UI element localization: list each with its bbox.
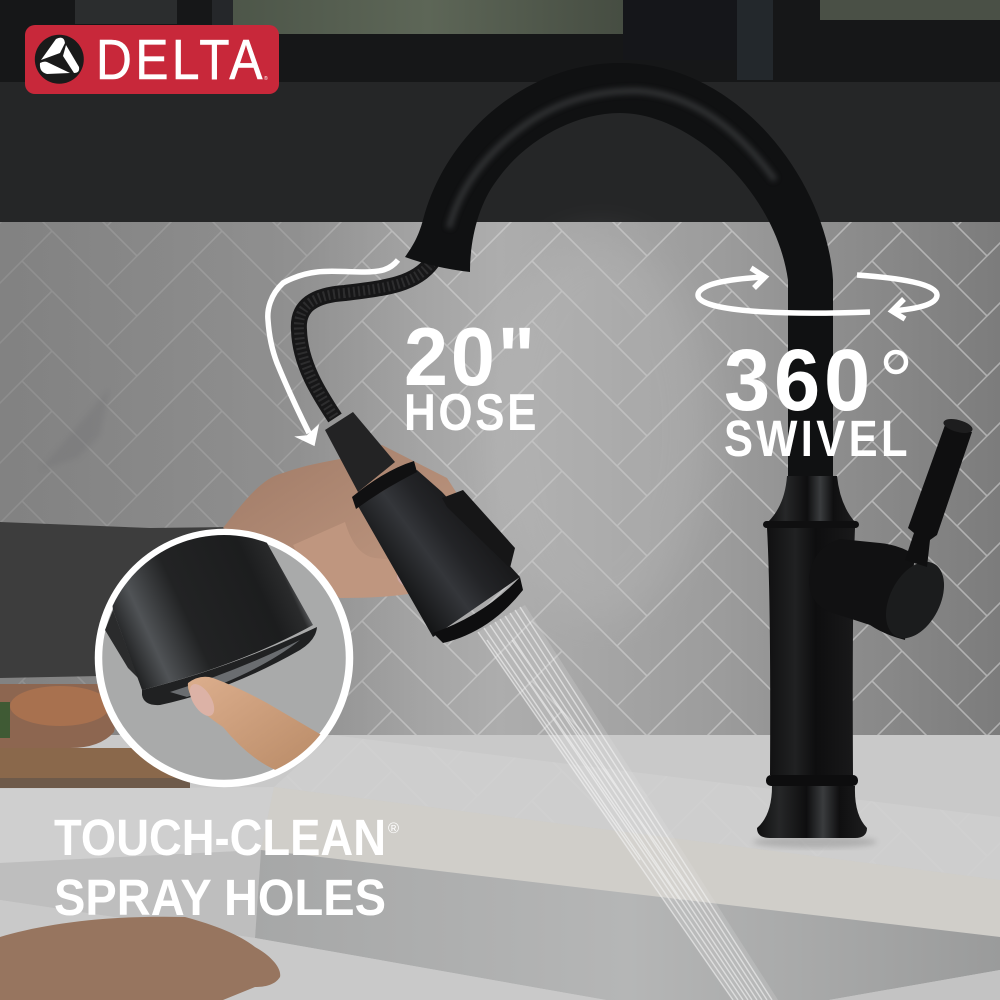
label: touch-clean spray holes: ® [388,820,399,837]
fingertip [188,677,325,772]
label: 20 inch hose: HOSE [404,384,539,442]
spray button edge [105,610,138,678]
label: touch-clean spray holes [54,809,399,926]
label: 360 degree swivel: SWIVEL [724,410,911,467]
spray head close-up [112,535,313,690]
Delta logo: DELTA [96,28,266,92]
inset: touch-clean spray holes [98,500,350,784]
faucet body [757,476,867,838]
hose length arrow [268,260,398,445]
countertop and sink [0,735,1000,1000]
hand holding spray head [223,445,456,598]
label: 20 inch hose: 20" [404,310,538,403]
faucet spout [405,63,833,480]
knit sleeve [0,522,240,678]
label: touch-clean spray holes: TOUCH-CLEAN [54,809,386,866]
faucet handle [809,416,974,648]
pull-down spray head [352,461,523,643]
label: touch-clean spray holes: SPRAY HOLES [54,869,386,926]
Delta logo: ® [264,75,268,82]
water spray [478,605,778,1000]
swivel rotation arrows [698,268,937,319]
marble herringbone backsplash [0,222,1000,817]
spray face rim [142,627,317,705]
spray button [442,490,515,568]
Delta logo [25,25,279,94]
dark upper cabinet and window [0,0,1000,224]
braided hose [299,262,432,418]
label: 360 degree swivel [724,332,911,467]
hose connector [325,412,395,492]
foreground hand [0,917,280,1000]
cutting board and bowl [0,684,190,788]
label: 360 degree swivel: 360 [724,332,874,429]
label: 20 inch hose [404,310,539,442]
